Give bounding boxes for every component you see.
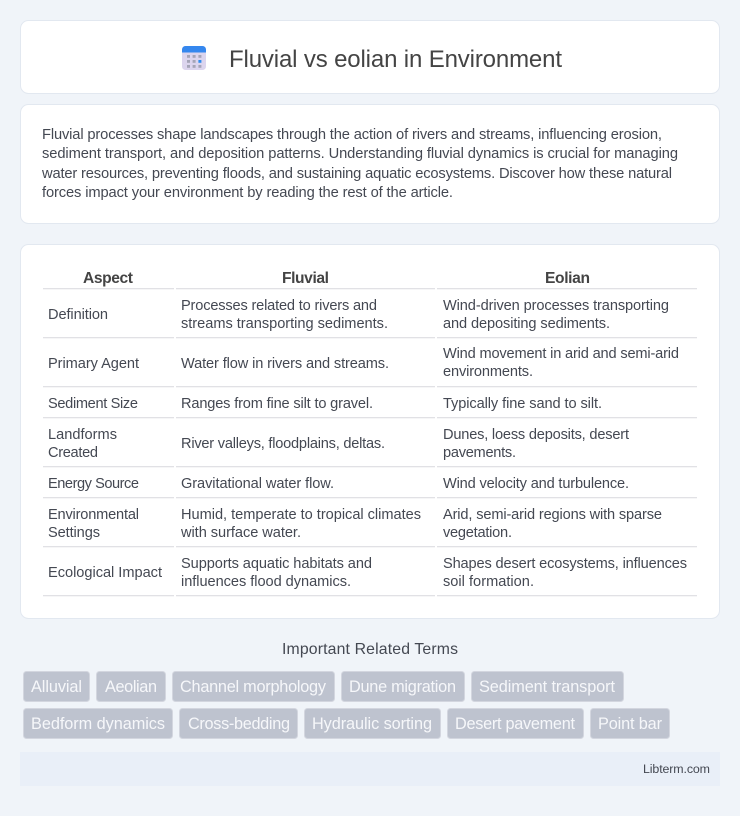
row: sediment size: Typically fine sand to silt. — [443, 396, 602, 412]
tag: Bedform dynamics — [24, 708, 172, 738]
tag: Aeolian — [96, 672, 166, 702]
footer: Libterm.com — [643, 762, 710, 776]
panel: comparison table — [20, 244, 720, 618]
row: landforms created: pavements. — [443, 445, 516, 461]
row: environmental settings: Settings — [48, 525, 100, 541]
intro text: sediment transport, and deposition patterns. Understanding fluvial dynamics is crucial for managing — [42, 146, 678, 162]
row: ecological impact: Supports aquatic habitats and — [181, 556, 372, 572]
row: environmental settings: Environmental — [48, 507, 139, 523]
tag: Alluvial — [24, 672, 90, 702]
tag: Point bar — [590, 708, 670, 738]
tag: Desert pavement — [448, 708, 584, 738]
row: definition — [48, 298, 669, 332]
tag: Cross-bedding: Cross-bedding — [188, 715, 290, 733]
tag: Point bar: Point bar — [598, 715, 663, 733]
row: landforms created — [48, 427, 629, 461]
footer — [20, 752, 720, 786]
row: definition: streams transporting sediments. — [181, 316, 388, 332]
tag: Dune migration — [342, 672, 464, 702]
row: sediment size: Sediment Size — [48, 396, 138, 412]
row: ecological impact: influences flood dynamics. — [181, 574, 351, 590]
tag: Cross-bedding — [180, 708, 298, 738]
row: ecological impact: Ecological Impact — [48, 565, 162, 581]
row: sediment size — [48, 396, 602, 412]
row: landforms created: Dunes, loess deposits, desert — [443, 427, 629, 443]
table header: Aspect — [83, 270, 133, 287]
table header: Eolian — [545, 270, 590, 287]
tag: Bedform dynamics: Bedform dynamics — [31, 715, 165, 733]
tag: Alluvial: Alluvial — [31, 678, 82, 696]
icon: calendar — [182, 46, 206, 70]
row: landforms created: Landforms — [48, 427, 117, 443]
tag: Aeolian: Aeolian — [105, 678, 157, 696]
row: energy source — [48, 476, 629, 492]
row: environmental settings: with surface water. — [180, 525, 301, 541]
tag: Desert pavement: Desert pavement — [455, 715, 575, 733]
row: sediment size: Ranges from fine silt to gravel. — [181, 396, 373, 412]
row: ecological impact: Shapes desert ecosystems, influences — [443, 556, 687, 572]
tag: Sediment transport — [472, 672, 624, 702]
row: ecological impact — [48, 556, 687, 590]
intro text: forces impact your environment by reading the rest of the article. — [42, 185, 453, 201]
row: energy source: Wind velocity and turbulence. — [443, 476, 629, 492]
row: landforms created: Created — [48, 445, 98, 461]
intro text — [41, 127, 678, 201]
row: primary agent: environments. — [443, 364, 533, 380]
tag: Channel morphology — [172, 672, 334, 702]
table header — [83, 270, 590, 287]
row: energy source: Gravitational water flow. — [181, 476, 334, 492]
row: primary agent — [48, 346, 679, 380]
intro text: Fluvial processes shape landscapes through the action of rivers and streams, influencing erosion, — [42, 127, 662, 143]
table header: Fluvial — [282, 270, 329, 287]
panel: header — [20, 20, 720, 94]
tag: Channel morphology: Channel morphology — [180, 678, 327, 696]
row: primary agent: Primary Agent — [48, 356, 139, 372]
row: environmental settings: Arid, semi-arid regions with sparse — [443, 507, 662, 523]
row: landforms created: River valleys, floodplains, deltas. — [181, 436, 385, 452]
related term tags — [24, 672, 670, 738]
row: definition: Definition — [48, 307, 108, 323]
heading: important related terms: Important Related Terms — [282, 641, 458, 658]
row: energy source: Energy Source — [48, 476, 139, 492]
row: environmental settings — [48, 507, 662, 541]
tag: Hydraulic sorting — [304, 708, 440, 738]
intro text: water resources, preventing floods, and sustaining aquatic ecosystems. Discover how these natural — [41, 166, 672, 182]
row: primary agent: Water flow in rivers and streams. — [181, 356, 389, 372]
row: environmental settings: Humid, temperate to tropical climates — [181, 507, 421, 523]
title: Fluvial vs eolian in Environment — [229, 46, 562, 73]
tag: Hydraulic sorting: Hydraulic sorting — [312, 715, 432, 733]
tag: Dune migration: Dune migration — [349, 678, 456, 696]
row: definition: and depositing sediments. — [443, 316, 610, 332]
panel: introduction — [20, 104, 720, 224]
row: primary agent: Wind movement in arid and semi-arid — [443, 346, 679, 362]
row: ecological impact: soil formation. — [443, 574, 534, 590]
row: definition: Processes related to rivers and — [181, 298, 377, 314]
tag: Sediment transport: Sediment transport — [479, 678, 615, 696]
row: definition: Wind-driven processes transporting — [443, 298, 669, 314]
row: environmental settings: vegetation. — [443, 525, 512, 541]
